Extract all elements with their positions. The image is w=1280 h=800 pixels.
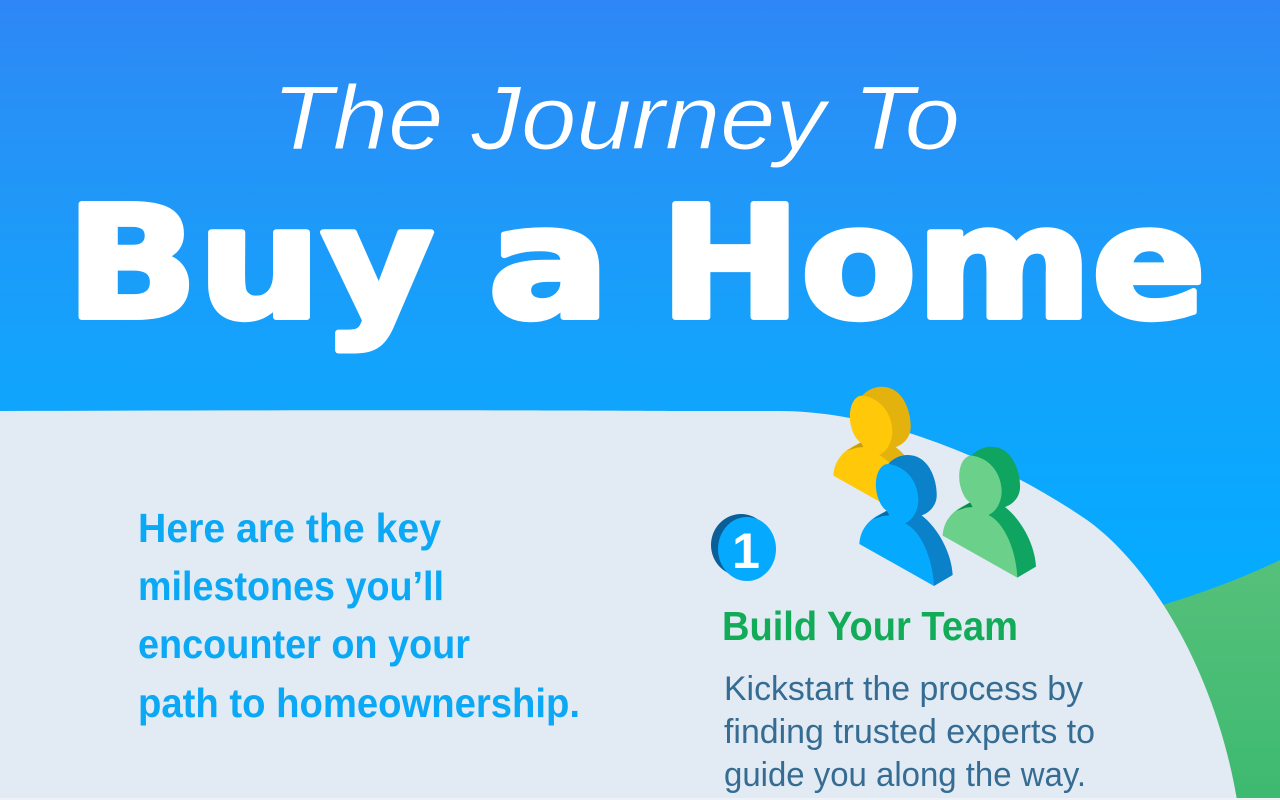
grey curved panel bbox=[0, 410, 1237, 800]
number badge 1 bbox=[711, 514, 776, 581]
step description: guide you along the way. bbox=[724, 756, 1086, 794]
person: blue bbox=[859, 455, 953, 586]
title: Buy a Home bbox=[66, 173, 1206, 354]
step description: Kickstart the process by bbox=[724, 670, 1083, 708]
step heading: Build Your Team bbox=[722, 603, 1018, 649]
title: The Journey To: The Journey To bbox=[272, 68, 960, 169]
icon: team of three people bbox=[833, 387, 1036, 586]
intro text: milestones you’ll bbox=[138, 563, 444, 609]
title: Buy a Home: Home bbox=[660, 173, 1206, 354]
step description bbox=[724, 670, 1095, 794]
green hill bbox=[1150, 560, 1280, 800]
title: Buy a Home: Buy bbox=[66, 173, 434, 354]
number badge 1: 1 bbox=[732, 523, 760, 579]
intro text: path to homeownership. bbox=[138, 680, 580, 726]
intro text bbox=[138, 505, 580, 726]
intro text: encounter on your bbox=[138, 621, 470, 667]
step description: finding trusted experts to bbox=[724, 713, 1095, 751]
person: yellow bbox=[833, 387, 927, 518]
title: Buy a Home: a bbox=[488, 173, 610, 354]
person: green bbox=[943, 447, 1036, 578]
intro text: Here are the key bbox=[138, 505, 441, 551]
